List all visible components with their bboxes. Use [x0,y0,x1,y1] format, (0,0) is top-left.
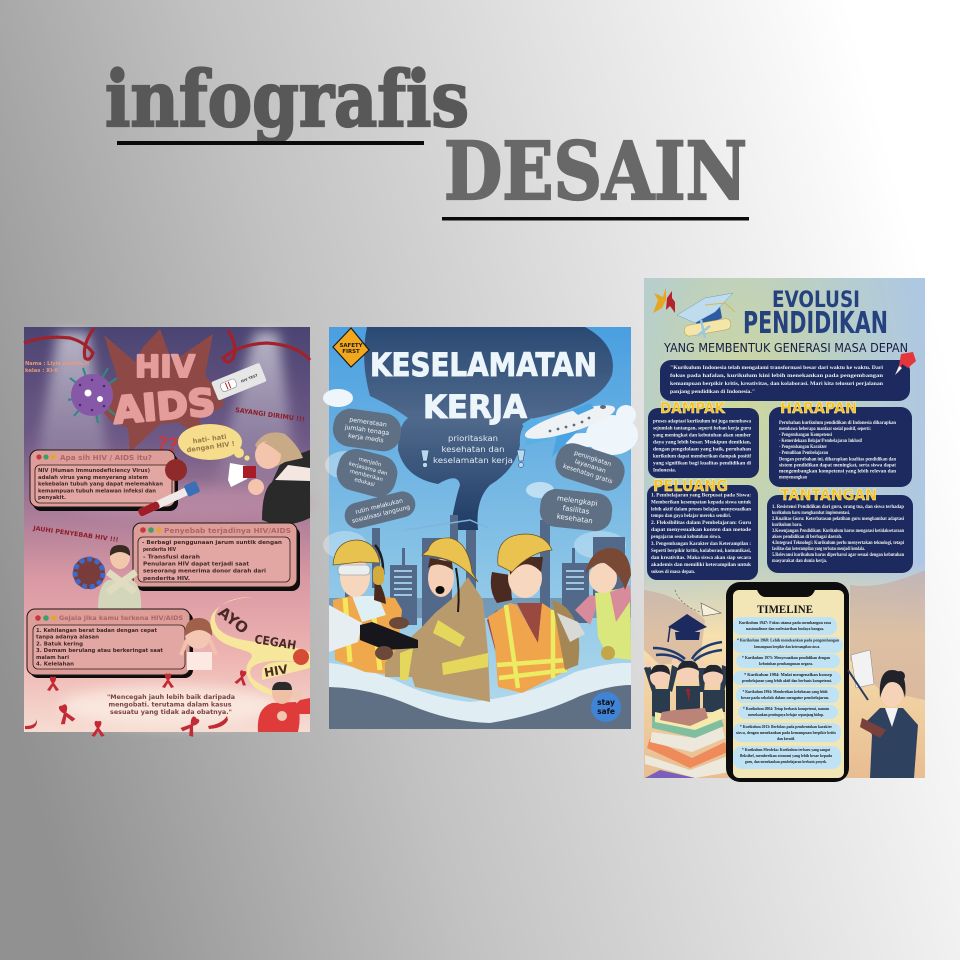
icon: small graduation cap [668,614,707,642]
pill: melengkapi fasilitas: kesehatan [556,512,593,525]
panel: harapan: Dengan perubahan ini, diharapkan kualitas pendidikan dan [779,458,896,462]
quote: sesuatu yang tidak ada obatnya." [110,709,232,716]
card: causes of HIV [133,523,300,591]
panel: tantangan: 3.Kesenjangan Pendidikan: Kurikulum harus mengatasi ketidaksetaraan [772,529,904,534]
panel: peluang: pengajaran sesuai kebutuhan siswa. [651,535,721,540]
quote box: kemampuan berpikir kritis, kreativitas, dan kolaborasi. Mari kita telusuri perjalanan [670,382,883,387]
panel: harapan: - Pengembangan Kompetensi [779,433,833,438]
card: causes of HIV: - Berbagi penggunaan jarum suntik dengan [142,540,282,546]
red awareness ribbons [25,669,249,738]
panel: tantangan: kurikulum baru. [772,523,802,528]
bottom wave dark [329,685,631,729]
quote box [660,360,910,401]
name label: Nama : Liyia auditia.H [25,361,89,367]
icon: paper plane [675,590,721,616]
panel: peluang: 1. Pembelajaran yang Berpusat pada Siswa: [651,494,751,498]
title word: DESAIN: DESAIN [444,124,747,218]
panel: dampak: yang signifikan bagi kualitas pendidikan di [653,462,752,466]
timeline item: 1975: * Kurikulum 1975: Menyesuaikan pendidikan dengan [742,655,830,660]
timeline phone: TIMELINE [757,604,813,616]
panel: dampak: kurikulum dapat memberikan dampak positif [653,454,751,460]
illustration: woman with megaphone [228,432,310,525]
panel: peluang: dan kreativitas. Maka siswa akan siap secara [651,556,752,561]
pill: menjalin kerjasama: menjalin [358,456,382,468]
card: what is HIV: Apa sih HIV / AIDS itu? [60,454,152,462]
panel: dampak: Indonesia. [653,468,676,474]
panel: peluang: PELUANG [653,476,728,495]
illustration: papers and pen [848,650,874,700]
panel: dampak: yang meningkat dan kebutuhan akan sumber [653,434,752,438]
icon: virus [68,368,117,423]
speech bubble: hati- hati [192,433,227,445]
panel: tantangan: kurikulum baru menghambat implementasi. [772,511,850,516]
card: symptoms: Gejala jika kamu terkena HIV/AIDS [59,614,183,622]
quote box: "Kurikulum Indonesia telah mengalami transformasi besar dari waktu ke waktu. Dari [670,366,884,371]
title word: infografis: infografis [105,55,469,145]
timeline item: merdeka [733,746,841,769]
panel: tantangan: TANTANGAN [780,486,877,504]
panel: peluang: tempo dan gaya belajar mereka sendiri. [651,514,731,519]
panel: dampak [648,399,759,478]
panel: harapan: - Kemerdekaan Belajar/Pembelajaran Inklusif [779,439,862,444]
banner: ayo cegah HIV: AYO [215,603,252,638]
illustration: girl with headache [181,618,216,670]
illustration: three students [644,658,730,720]
sign: safety first [333,328,369,367]
card: causes of HIV: Penularan HIV dapat terjadi saat [143,562,249,568]
timeline phone [726,582,849,782]
panel: tantangan: 5.Relevansi kurikulum harus diperbarui agar sesuai dengan kebutuhan [772,553,904,558]
panel: tantangan: 2.Kualitas Guru: Keterbatasan pelatihan guru menghambat adaptasi [772,517,905,522]
panel: peluang: dapat menyesuaikan konten dan metode [651,528,752,533]
subtitle: kesehatan dan [442,444,504,454]
panel: peluang [647,476,758,580]
badge: stay safe: stay [597,698,615,707]
heading: HIV AIDS: AIDS [111,381,217,432]
panel: harapan: Perubahan kurikulum pendidikan di Indonesia diharapkan [779,421,896,426]
heading: HIV AIDS: HIV [135,350,196,385]
panel: peluang: lebih aktif dalam proses belajar, menyesuaikan [651,508,751,512]
panel: tantangan: fasilitas dan keterampilan yang terbatas menjadi kendala. [772,547,865,552]
timeline item: 2013: * Kurikulum 2013: Berfokus pada pembentukan karakter [740,724,832,729]
panel: harapan: sistem pendidikan dapat meningkat, serta siswa dapat [779,464,896,468]
timeline item: merdeka: guru, dan menekankan pembelajaran berbasis proyek. [745,759,827,764]
clouds [323,389,638,559]
panel: Keselamatan Kerja poster [323,327,638,729]
heading: evolusi pendidikan [743,288,888,341]
banner: ayo cegah HIV: CEGAH [254,632,297,653]
panel: dampak: daya yang lebih besar. Meskipun demikian, [653,440,752,446]
card: what is HIV: kemampuan tubuh melawan infeksi dan [38,488,156,494]
heading: evolusi pendidikan: PENDIDIKAN [743,306,888,341]
pill: menjalin kerjasama: edukasi [354,477,375,488]
pill: rutin sosialisasi: rutin melakukan [355,497,404,516]
card: what is HIV: penyakit. [38,495,66,501]
illustration: worker with vest [487,534,585,693]
timeline item: merdeka: * Kurikulum Merdeka: Kurikulum terbaru yang sangat [742,747,830,752]
panel: tantangan: 4.Integrasi Teknologi: Kurikulum perlu menyertakan teknologi, tetapi [772,541,905,546]
panel: harapan: - Pengembangan Karakter [779,445,827,450]
panel: peluang: 3. Pengembangan Karakter dan Keterampilan : [651,542,751,547]
quote: mengobati. terutama dalam kasus [108,702,232,708]
card: symptoms: 2. Batuk kering [36,642,83,648]
panel: harapan: menyenangkan [779,476,807,480]
quote: "Mencegah jauh lebih baik daripada [107,694,235,701]
panel: harapan: membawa beberapa manfaat sosial positif, seperti: [779,427,871,432]
illustration: worker with clipboard [575,548,631,660]
heading: keselamatan kerja: KERJA [423,388,527,426]
timeline item: 1947: nasionalisme dan melestarikan budaya bangsa. [746,626,824,631]
panel: peluang: Seperti berpikir kritis, kolaborasi, komunikasi, [651,549,752,554]
panel: tantangan [767,486,913,573]
pill: pemerataan: kerja medis [348,432,384,444]
timeline item: 1968 [733,637,843,653]
title [105,55,749,220]
pill: rutin sosialisasi [342,489,418,531]
timeline item: 1994: besar pada sekolah dalam mengatur pembelajaran. [741,695,829,700]
panel: peluang: akademis dan memiliki keterampilan untuk [651,563,751,568]
ribbons at top [24,328,310,362]
pill: pemerataan: jumlah tenaga [343,424,390,437]
speech bubble: dengan HIV ! [186,440,235,454]
heading: HIV AIDS [111,350,217,432]
title underline 1 [117,141,424,145]
timeline item: 1984 [733,671,841,685]
icon: graduation cap and scroll [677,293,735,338]
pill: menjalin kerjasama: kerjasama dan [348,461,388,477]
city skyline [329,515,631,628]
pill: melengkapi fasilitas [538,487,614,533]
sign: safety first: SAFETY [340,343,363,349]
card: symptoms: malam hari [36,655,69,661]
pill: pemerataan: pemerataan [349,416,387,429]
starburst [98,329,224,452]
heading: evolusi pendidikan: EVOLUSI [772,288,860,313]
panel: dampak: dengan pengelolaan yang baik, perubahan [653,448,751,452]
timeline item: 1975: kebutuhan pembangunan negara. [759,661,813,666]
bottom wave light [329,663,631,729]
panel: dampak: proses adaptasi kurikulum ini juga membawa [653,420,752,424]
icon: airplane [522,399,618,457]
timeline item: 2004: * Kurikulum 2004: Tetap berbasis kompetensi, namun [743,706,829,711]
question marks: ?? [156,433,180,457]
panel: Evolusi Pendidikan poster [644,278,925,782]
card: symptoms: 3. Demam berulang atau berkeringat saat [36,648,163,654]
panel: peluang: 2. Fleksibilitas dalam Pembelajaran: Guru [651,521,751,526]
icon: push pin [895,352,916,375]
subtitle: keselamatan kerja [433,455,513,465]
card: causes of HIV: penderita HIV. [143,576,190,582]
illustration: boy refusing and virus [73,545,141,609]
panel: tantangan: akses pendidikan di berbagai daerah. [772,535,842,540]
card: causes of HIV: Penyebab terjadinya HIV/AIDS [164,527,291,535]
panel: dampak: sejumlah tantangan, seperti beban kerja guru [653,426,751,432]
pill: peningkatan layanan: kesehatan gratis [562,463,613,485]
banner: ayo cegah HIV [210,597,310,700]
pill: rutin sosialisasi: sosialisasi langsung [351,504,411,525]
illustration: firefighter [385,538,490,702]
card: symptoms: 4. Kelelahan [36,662,74,668]
timeline item: 1968: kemampuan berpikir dan keterampilan siswa. [754,644,820,649]
card: what is HIV [30,450,178,511]
panel: peluang: Memberikan kesempatan kepada siswa untuk [651,500,751,506]
timeline item: 2004 [738,705,838,719]
icon: test strip: HIV TEST [240,373,259,384]
pill: menjalin kerjasama [333,445,401,501]
badge: stay safe [591,692,621,722]
pill: peningkatan layanan [551,439,629,495]
quote box: fokus pada hafalan, kurikulum kini lebih menekankan pada pengembangan [670,374,883,379]
icon: celebrating people [653,287,675,313]
timeline item: 2013: siswa, dengan menekankan pada kemampuan berpikir kritis [736,730,836,735]
icon: blood cell and test tube [136,459,200,519]
panel: tantangan: 1. Resistensi Pendidikan dari guru, orang tua, dan siswa terhadap [772,505,904,510]
timeline item: 1984: * Kurikulum 1984: Mulai mengenalkan konsep [744,672,833,677]
timeline item: 2013 [733,723,841,742]
illustration: worker with goggles [333,540,402,675]
heading: keselamatan kerja: KESELAMATAN [370,346,597,384]
timeline item: merdeka: fleksibel, memberikan otonomi yang lebih besar kepada [740,753,833,758]
timeline item: 1975 [736,654,840,668]
illustration: teacher with book [860,670,918,778]
name label [25,361,89,374]
panel: harapan: - Pemulihan Pembelajaran [779,451,828,456]
panel: harapan: HARAPAN [780,399,857,417]
banner: ayo cegah HIV: HIV [263,662,290,680]
timeline item: 1947: Kurikulum 1947: Fokus utama pada membangun rasa [739,620,832,625]
badge: stay safe: safe [597,707,615,716]
speech bubble [178,424,250,461]
quote [107,694,235,716]
timeline item: 2013: dan kreatif. [777,736,795,741]
card: causes of HIV: seseorang menerima donor darah dari [143,568,266,574]
subtitle [433,433,513,465]
icon: exclamation marks [421,450,525,468]
panel: peluang: sukses di masa depan. [651,570,695,575]
callout: sayangi dirimu: SAYANGI DIRIMU !!! [235,406,305,424]
subtitle: generasi masa depan: YANG MEMBENTUK GENERASI MASA DEPAN [663,341,908,355]
name label: kelas : XI-6 [25,368,58,374]
panel: tantangan: masyarakat dan dunia kerja. [772,559,827,564]
timeline item: 2004: menekankan pentingnya belajar sepanjang hidup. [748,712,824,717]
card: causes of HIV: - Transfusi darah [143,554,200,560]
card: what is HIV: NIV (Human Immunodeficiency Virus) [38,468,150,474]
pill: menjalin kerjasama: memberikan [349,469,383,483]
card: causes of HIV: penderita HIV [143,547,177,553]
pill: peningkatan layanan: peningkatan [573,450,612,468]
icon: open book wings [653,642,722,662]
pill: melengkapi fasilitas: melengkapi [556,494,598,508]
icon: test strip [211,363,267,401]
panel: dampak: DAMPAK [660,399,726,417]
callout: jauhi penyebab: JAUHI PENYEBAB HIV !!! [32,525,119,544]
illustration: man in red [258,682,310,732]
timeline item: 1947 [733,617,837,635]
sign: safety first: FIRST [342,349,360,355]
dark smoke shape [364,327,613,530]
timeline item: 1994 [736,687,839,703]
pill: pemerataan [331,406,403,454]
timeline item: 1984: pembelajaran yang lebih aktif dan berbasis kompetensi. [742,678,832,683]
card: symptoms: tanpa adanya alasan [36,634,99,640]
panel: harapan: mengembangkan kompetensi yang lebih relevan dan [779,470,896,474]
city window grid [394,570,584,596]
card: what is HIV: adalah virus yang menyerang sistem [38,475,148,481]
title underline 2 [442,217,749,220]
card: what is HIV: kekebalan tubuh yang dapat melemahkan [38,482,163,488]
card: symptoms: 1. Kehilangan berat badan dengan cepat [36,628,157,634]
timeline item: 1994: * Kurikulum 1994: Memberikan kebebasan yang lebih [742,689,828,694]
pill: melengkapi fasilitas: fasilitas [562,504,590,516]
quote box: panjang pendidikan di Indonesia." [670,390,755,395]
illustration: fire hose [329,605,418,660]
panel: HIV AIDS poster [24,327,315,738]
illustration: book stack [645,708,730,778]
pill: peningkatan layanan: layananan [574,458,607,475]
heading: keselamatan kerja [370,346,597,426]
panel: harapan [769,399,912,487]
subtitle: prioritaskan [448,433,498,443]
card: symptoms [27,609,193,678]
timeline item: 1968: * Kurikulum 1968: Lebih menekankan pada pengembangan [737,638,839,642]
